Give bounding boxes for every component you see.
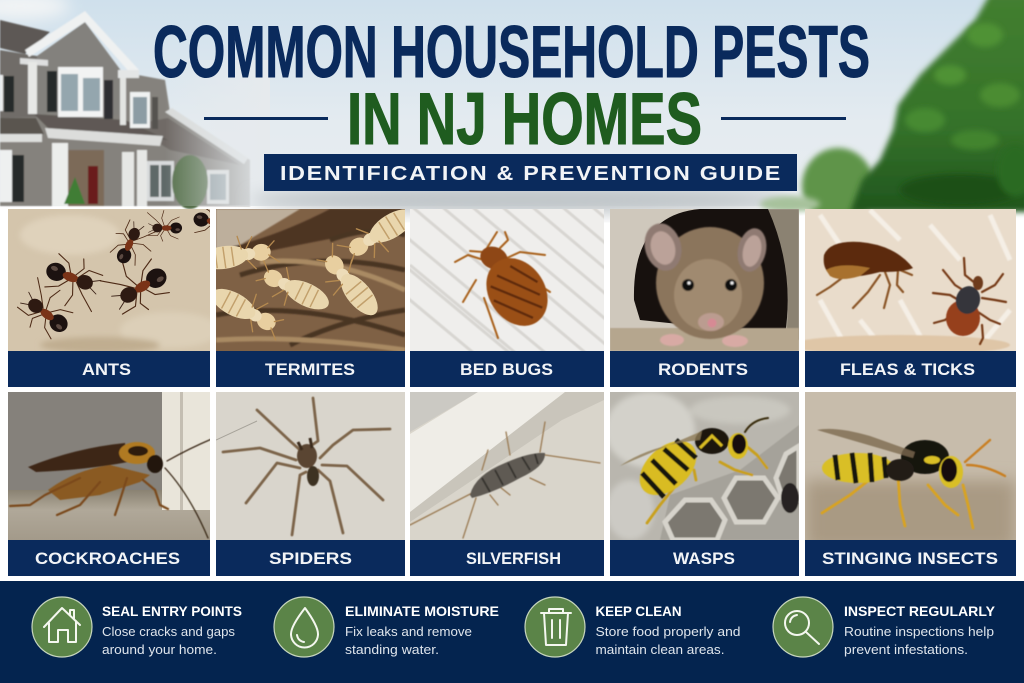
tip: keep clean: KEEP CLEAN [596,603,682,619]
panel: silverfish [410,392,604,576]
fog over house [165,60,270,206]
header banner [0,0,1024,224]
icon: trash can [525,597,585,657]
panel: ants [8,202,240,387]
tip: inspect regularly [773,597,996,657]
subtitle bar: IDENTIFICATION & PREVENTION GUIDE [280,162,782,185]
panel: cockroaches [8,392,214,576]
tip: inspect regularly: INSPECT REGULARLY [844,603,996,619]
tip: inspect regularly: Routine inspections help [844,625,994,639]
tip: seal entry points: around your home. [102,643,217,657]
panel: bed bugs [320,205,780,387]
panel: rodents [610,209,799,387]
icon: water drop [274,597,334,657]
icon: house [32,597,92,657]
panel: rodents: RODENTS [658,360,748,379]
panel: wasps [605,392,799,576]
panel: bed bugs: BED BUGS [460,360,553,379]
tip: seal entry points: SEAL ENTRY POINTS [102,603,242,619]
panel: fleas and ticks [790,209,1016,387]
tip: keep clean [525,597,741,657]
panel: fleas and ticks: FLEAS & TICKS [840,360,975,379]
panel: wasps: WASPS [673,549,735,568]
tip: keep clean: Store food properly and [596,625,741,639]
title [153,12,870,160]
tip: seal entry points: Close cracks and gaps [102,625,235,639]
prevention footer [0,581,1024,683]
panel: stinging insects [805,392,1016,576]
panel: termites: TERMITES [265,360,355,379]
panel: spiders: SPIDERS [269,549,352,568]
panel: spiders [216,392,405,576]
tip: seal entry points [32,597,242,657]
panel: stinging insects: STINGING INSECTS [822,549,998,568]
tip: inspect regularly: prevent infestations. [844,643,968,657]
house illustration [0,11,250,209]
panel: cockroaches: COCKROACHES [35,549,180,568]
title: IN NJ HOMES [347,79,702,160]
panel: silverfish: SILVERFISH [466,549,561,568]
trees illustration [760,0,1024,224]
tip: eliminate moisture: standing water. [345,643,439,657]
tip: eliminate moisture: Fix leaks and remove [345,625,472,639]
tip: eliminate moisture [274,597,499,657]
panel: termites [198,199,423,387]
icon: magnifying glass [773,597,833,657]
subtitle bar [264,154,797,191]
tip: eliminate moisture: ELIMINATE MOISTURE [345,603,499,619]
tip: keep clean: maintain clean areas. [596,643,724,657]
panel: ants: ANTS [82,360,131,379]
